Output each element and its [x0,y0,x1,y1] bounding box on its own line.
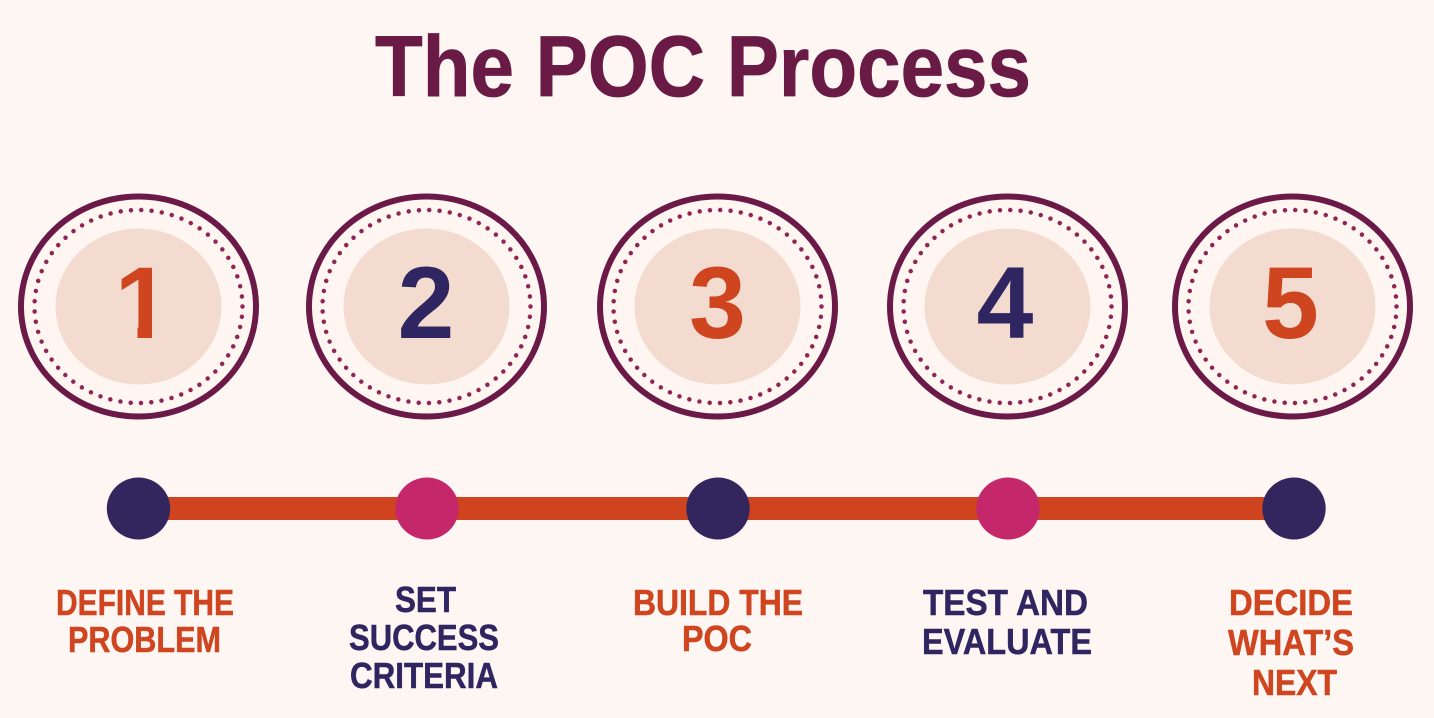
label: define the problem: DEFINE THE [56,582,234,623]
step 5 badge [1175,196,1410,416]
label: build the poc [633,582,803,659]
step 1 badge [21,196,256,416]
title: The POC Process [375,19,1031,115]
label: decide what's next: DECIDE [1229,582,1353,623]
label: define the problem [56,582,234,660]
step 4 badge [890,196,1125,416]
timeline [107,478,1326,540]
label: decide what's next: NEXT [1252,662,1337,703]
label: build the poc: BUILD THE [633,582,803,623]
step 4 badge: 4 [977,246,1034,360]
label: test and evaluate: EVALUATE [922,621,1092,662]
label: define the problem: PROBLEM [68,619,221,660]
step 2 badge [309,196,544,416]
step 2 badge: 2 [398,246,454,360]
label: set success criteria: SUCCESS [349,617,499,658]
step 3 badge: 3 [689,246,746,360]
label: test and evaluate: TEST AND [923,582,1088,623]
step 3 badge [600,196,835,416]
label: decide what's next: WHAT’S [1228,622,1354,663]
label: set success criteria: SET [395,579,456,620]
label: set success criteria: CRITERIA [350,655,498,696]
label: test and evaluate [922,582,1092,662]
step 5 badge: 5 [1262,246,1319,360]
step 1 badge: 1 [115,246,171,360]
label: set success criteria [349,579,499,696]
label: build the poc: POC [682,618,752,659]
label: decide what's next [1228,582,1354,703]
